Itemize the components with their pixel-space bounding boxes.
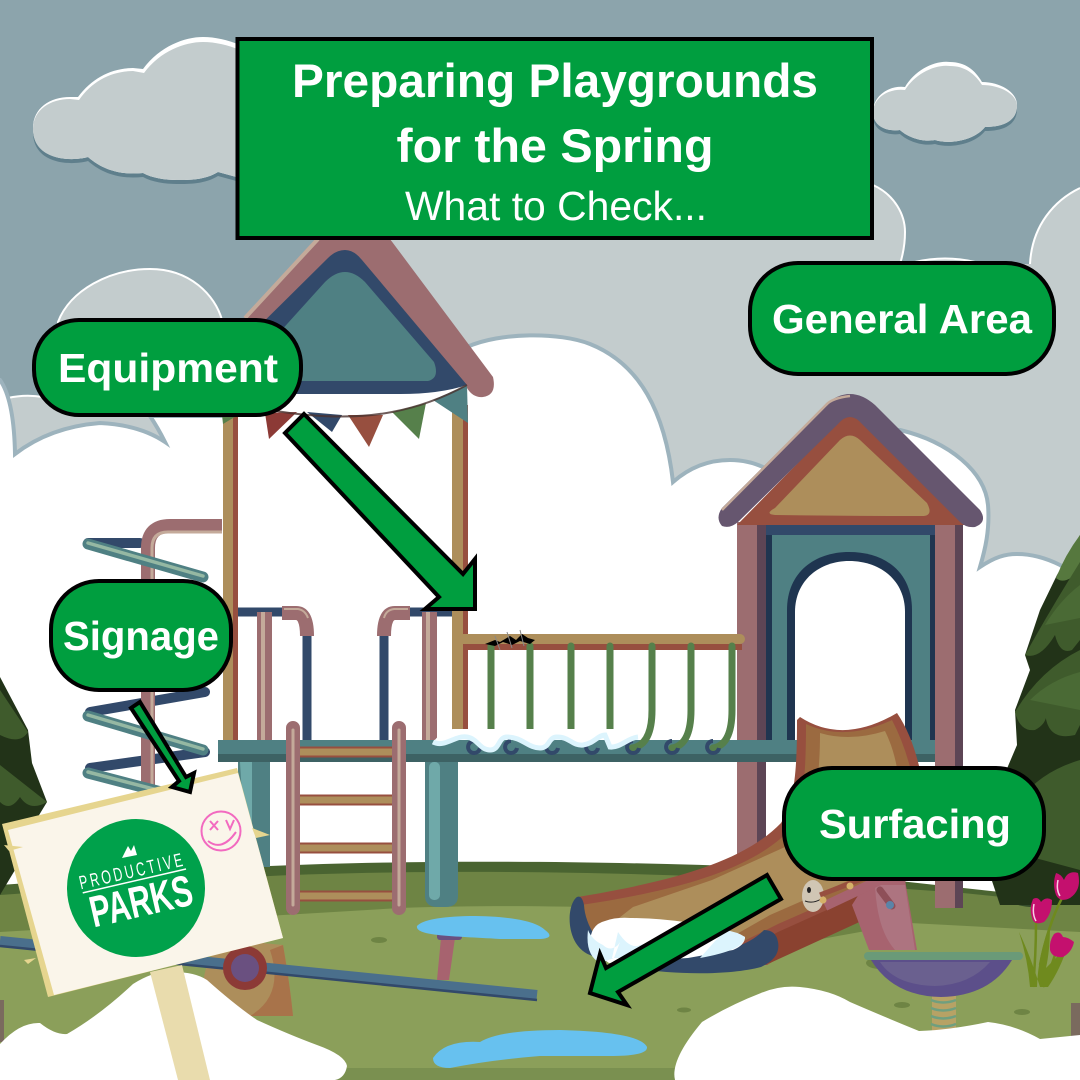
cloud: top left [33,37,240,184]
snow on platform [433,729,640,750]
rope bridge [463,630,742,753]
label: surfacing: Surfacing [819,801,1011,847]
seesaw [0,933,537,1016]
platform and legs [218,740,935,907]
tulips [1019,872,1079,987]
cloud: top right [873,62,1017,146]
tree: left [0,677,47,895]
subtitle: What to Check... [405,183,707,229]
smiley doodle [202,812,240,850]
spiral climber [88,526,222,795]
tower one [222,235,494,740]
puddle: back [417,916,549,939]
tower one: bunting [222,385,468,447]
label: general area [750,263,1054,374]
label: equipment [34,320,301,415]
tower two [718,394,983,908]
posts at the edges [0,1000,1080,1042]
sign with logo [2,768,283,1080]
slide [570,713,925,973]
tower one: posts [223,405,468,740]
tower one: roof [235,235,494,397]
snow pile: right [674,987,1080,1080]
spinner seat [864,952,1023,1032]
ladder [293,728,399,908]
label: signage: Signage [63,613,219,659]
white clouds bank [0,335,1080,1080]
logo: Productive Parks [67,819,205,957]
arrow: signage [131,702,194,792]
snow pile: left [0,972,347,1080]
sign post [150,965,210,1080]
label: equipment: Equipment [58,345,278,391]
label: general area: General Area [772,296,1033,342]
handrails [238,609,452,740]
ground [0,862,1080,1080]
logo: Productive Parks: PRODUCTIVE [77,850,187,894]
tree: right [985,535,1080,905]
title heading: for the Spring [396,119,714,172]
label: signage [51,581,231,690]
sign board [2,768,283,997]
title box [238,39,872,238]
label: surfacing [784,768,1044,879]
puddle: front [433,1030,647,1068]
arrow: surfacing [590,875,781,1005]
logo: Productive Parks: PARKS [85,866,197,937]
crack on bridge [485,634,535,646]
spring rider [802,875,917,950]
title heading: Preparing Playgrounds [292,54,818,107]
title heading [292,54,818,172]
arrow: equipment [285,414,475,609]
